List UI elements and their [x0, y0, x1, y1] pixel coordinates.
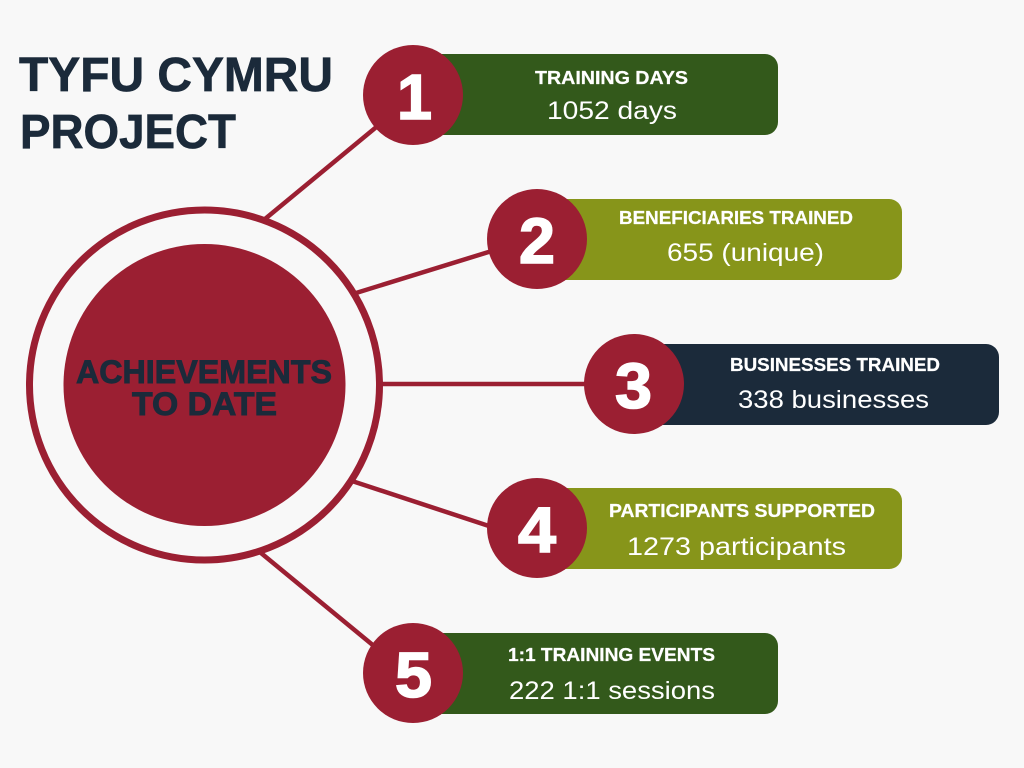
item 1: training days: 1: [397, 61, 432, 133]
item 4: participants supported: [487, 478, 902, 578]
title: PROJECT: [20, 106, 236, 159]
central hub: achievements to date: ACHIEVEMENTS: [76, 354, 332, 390]
item 5: 1:1 training events: 1:1 TRAINING EVENTS: [508, 645, 715, 665]
item 5: 1:1 training events: 222 1:1 sessions: [509, 677, 715, 705]
item 1: training days: [363, 45, 778, 145]
title: [19, 49, 333, 159]
item 4: participants supported: PARTICIPANTS SUPPORTED: [609, 501, 875, 521]
item 3: businesses trained: 338 businesses: [738, 386, 929, 414]
item 2: beneficiaries trained: 655 (unique): [667, 239, 824, 267]
central hub: achievements to date: TO DATE: [132, 386, 277, 422]
item 5: 1:1 training events: [363, 623, 778, 723]
item 2: beneficiaries trained: 2: [519, 205, 555, 277]
connector lines: [261, 124, 590, 651]
item 4: participants supported: 1273 participants: [627, 533, 846, 561]
item 3: businesses trained: [584, 334, 999, 434]
item 5: 1:1 training events: 5: [395, 639, 432, 711]
item 4: participants supported: 4: [518, 494, 556, 566]
item 1: training days: 1052 days: [547, 97, 677, 125]
item 2: beneficiaries trained: BENEFICIARIES TRAINED: [619, 208, 853, 228]
item 3: businesses trained: BUSINESSES TRAINED: [730, 355, 940, 375]
item 3: businesses trained: 3: [615, 350, 652, 422]
central hub: achievements to date: [30, 210, 380, 560]
title: TYFU CYMRU: [19, 49, 333, 102]
item 2: beneficiaries trained: [487, 189, 902, 289]
item 1: training days: TRAINING DAYS: [535, 68, 688, 88]
